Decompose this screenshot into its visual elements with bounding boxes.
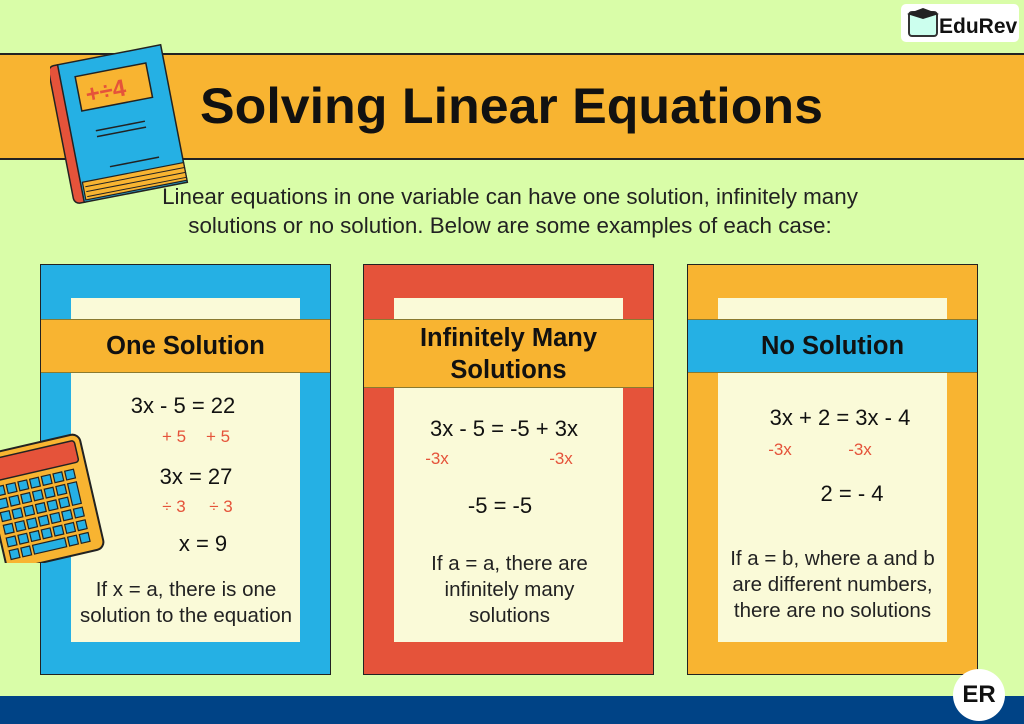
icon: book: +÷4 — [83, 74, 129, 109]
equations: no solution: -3x — [848, 440, 872, 459]
subtitle: Linear equations in one variable can have one solution, infinitely many — [162, 184, 858, 209]
note: no solution: there are no solutions — [734, 599, 931, 622]
equations: infinitely many: 3x - 5 = -5 + 3x — [430, 416, 578, 441]
equations: one solution: + 5 — [162, 427, 186, 446]
equations: no solution: 3x + 2 = 3x - 4 — [770, 405, 910, 430]
equations: one solution — [131, 393, 235, 556]
equations: one solution: 3x = 27 — [160, 464, 232, 489]
heading: One Solution: One Solution — [106, 332, 265, 360]
equations: one solution: 3x - 5 = 22 — [131, 393, 235, 418]
heading: No Solution: No Solution — [761, 332, 904, 360]
note: infinitely many — [431, 552, 588, 627]
equations: one solution: + 5 — [206, 427, 230, 446]
footer band — [0, 696, 1024, 724]
note: infinitely many: If a = a, there are — [431, 552, 588, 575]
logo: EduRev: EduRev — [939, 15, 1018, 38]
equations: no solution: 2 = - 4 — [821, 481, 883, 506]
equations: infinitely many: -3x — [549, 449, 573, 468]
equations: infinitely many: -3x — [425, 449, 449, 468]
note: infinitely many: infinitely many — [445, 578, 574, 601]
panel: one solution — [40, 264, 331, 675]
note: no solution: are different numbers, — [732, 573, 933, 596]
note: one solution: If x = a, there is one — [96, 578, 276, 601]
icon: book — [50, 44, 188, 204]
equations: one solution: ÷ 3 — [209, 497, 233, 516]
title banner — [0, 53, 1024, 160]
logo: ER badge — [953, 669, 1005, 721]
heading: Infinitely Many Solutions: Solutions — [450, 356, 567, 384]
equations: no solution: -3x — [768, 440, 792, 459]
heading: Infinitely Many Solutions — [364, 319, 653, 388]
note: no solution — [730, 547, 935, 622]
heading: Infinitely Many Solutions: Infinitely Many — [420, 324, 597, 352]
equations: one solution: x = 9 — [179, 531, 227, 556]
equations: one solution: ÷ 3 — [162, 497, 186, 516]
heading: One Solution — [41, 319, 330, 373]
icon: calculator — [0, 434, 104, 563]
equations: infinitely many — [425, 416, 578, 518]
heading: No Solution — [688, 319, 977, 373]
panel: no solution — [687, 264, 978, 675]
note: infinitely many: solutions — [469, 604, 550, 627]
panel: infinitely many solutions — [363, 264, 654, 675]
logo: ER badge: ER — [962, 681, 996, 708]
note: no solution: If a = b, where a and b — [730, 547, 935, 570]
subtitle — [162, 184, 858, 238]
note: one solution — [80, 578, 292, 627]
subtitle: solutions or no solution. Below are some examples of each case: — [188, 213, 832, 238]
logo: EduRev — [901, 4, 1019, 42]
title banner: Solving Linear Equations — [200, 78, 823, 134]
equations: no solution — [768, 405, 910, 506]
note: one solution: solution to the equation — [80, 604, 292, 627]
equations: infinitely many: -5 = -5 — [468, 493, 532, 518]
